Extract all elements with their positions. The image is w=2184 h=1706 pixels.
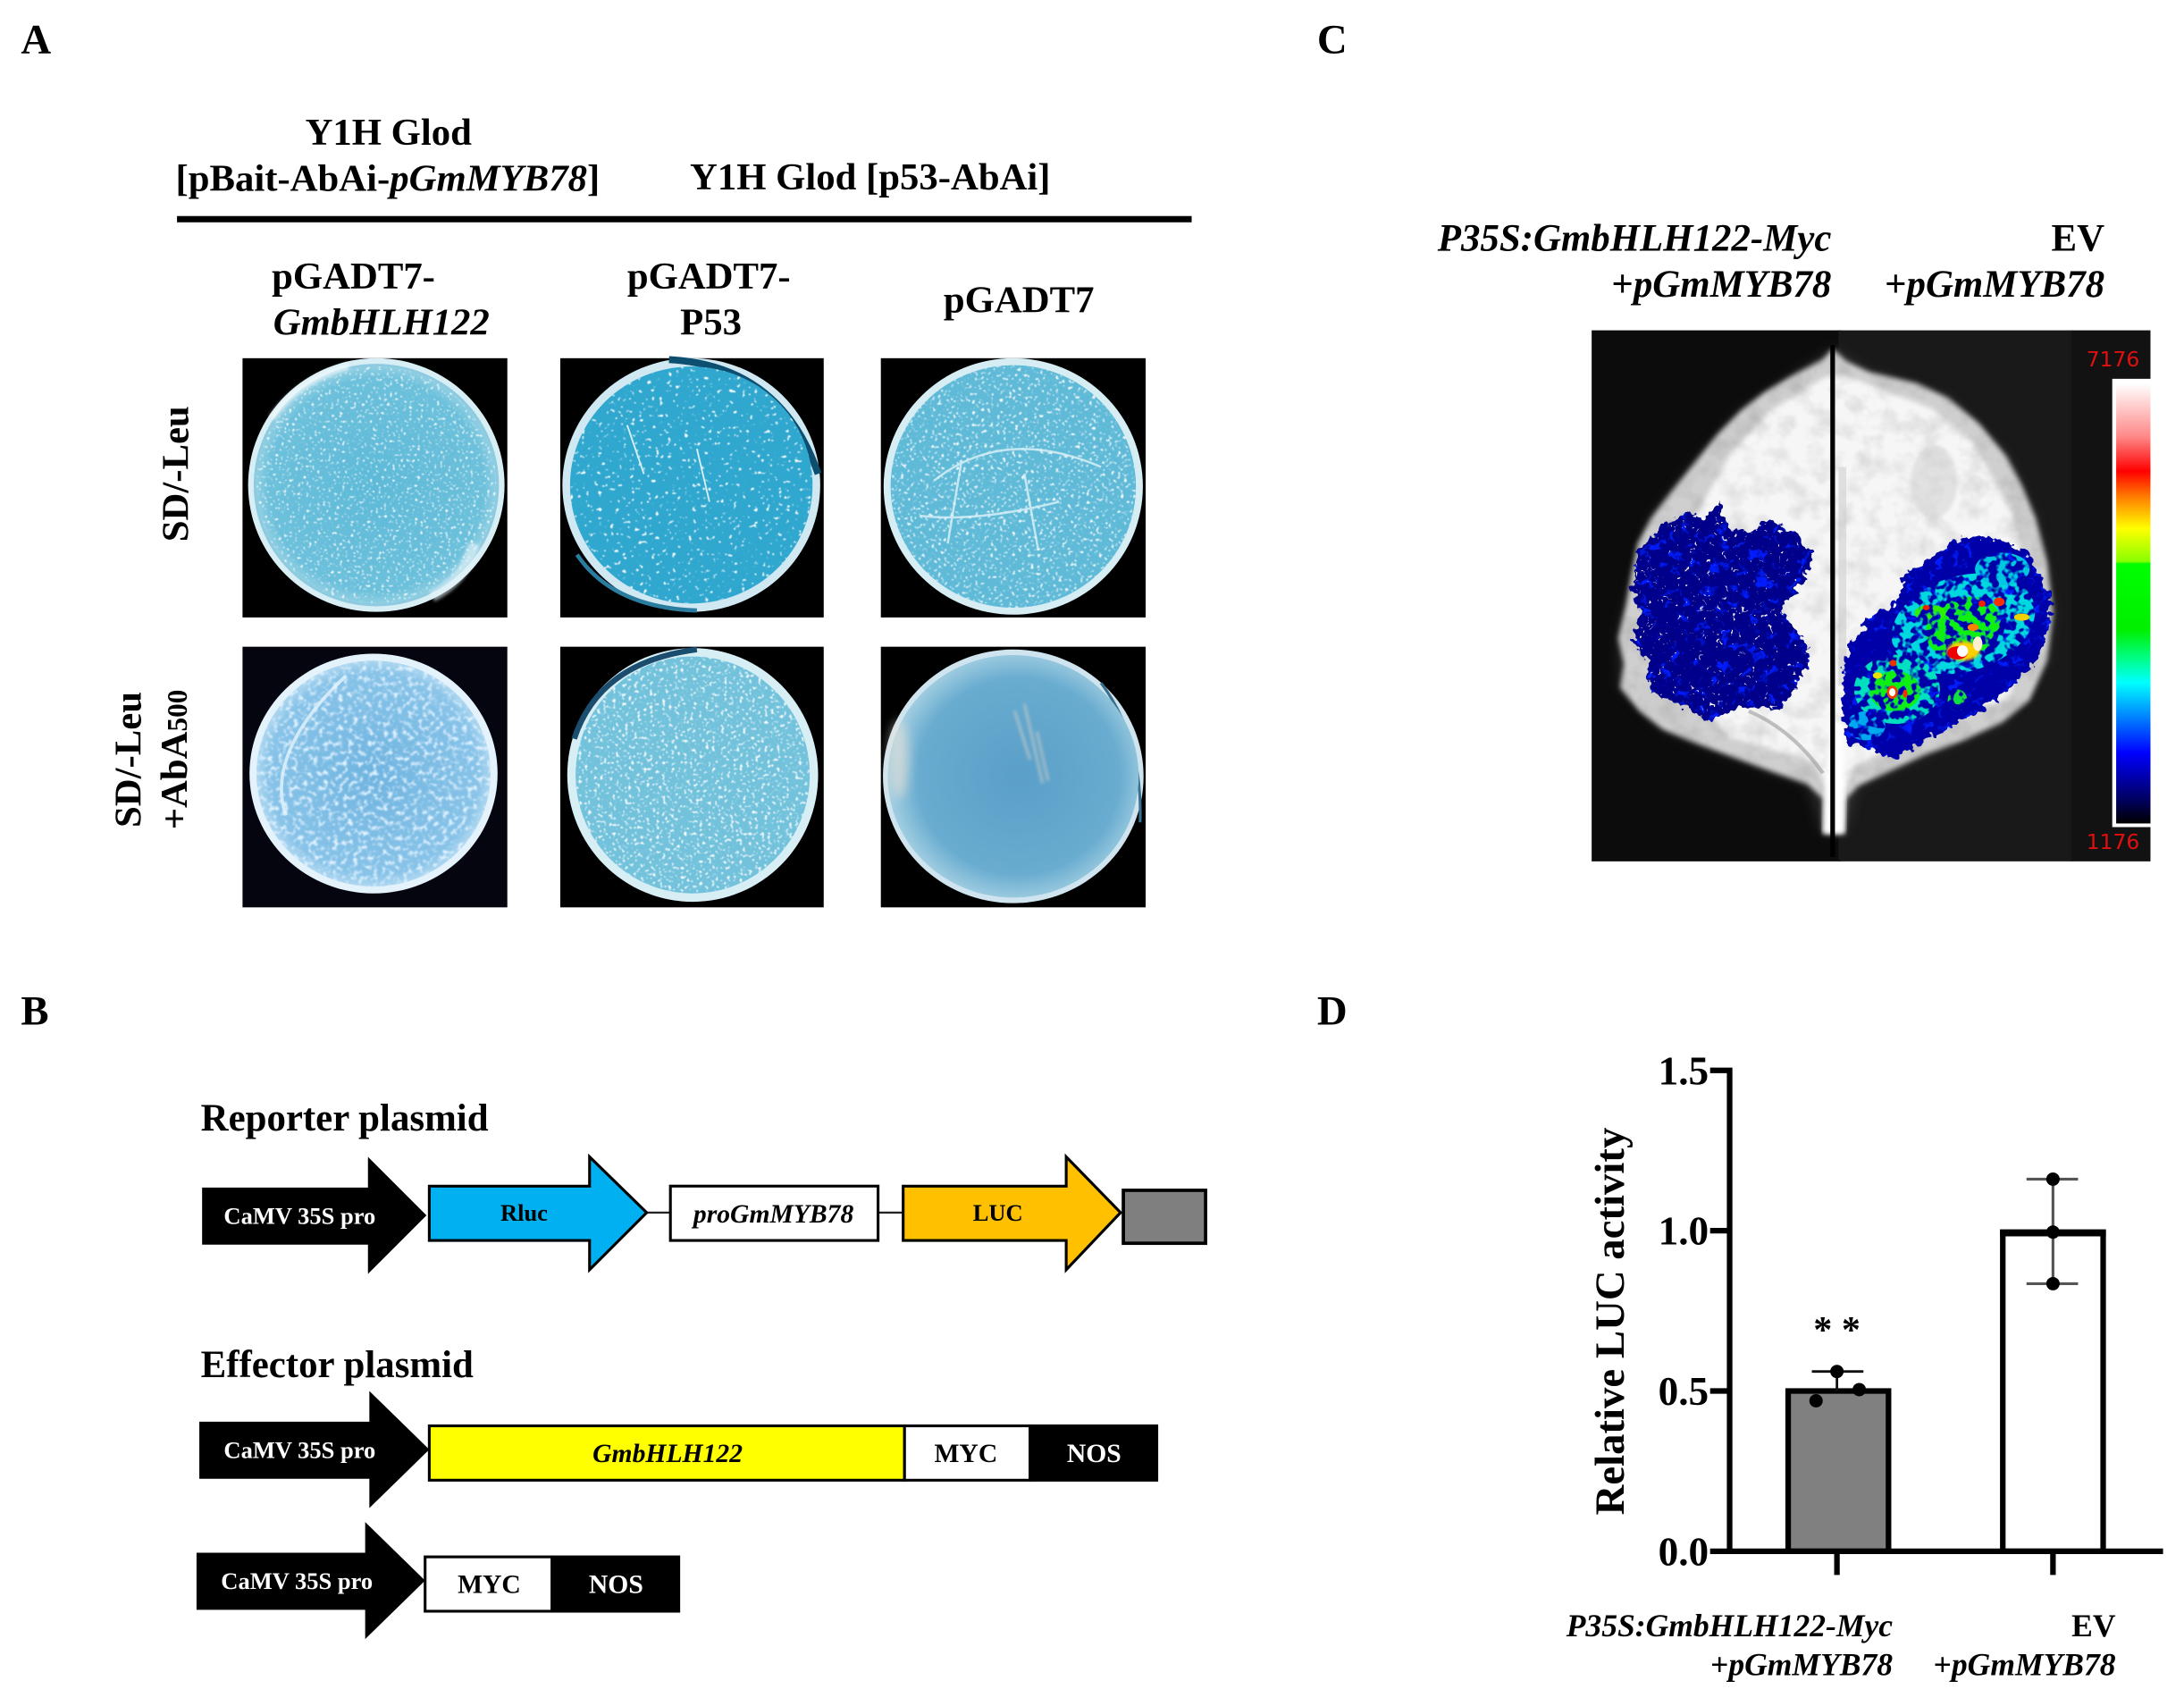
sample label right: EV bbox=[2052, 218, 2104, 260]
plate 6 bbox=[881, 647, 1146, 907]
box: MYC, empty vector bbox=[425, 1557, 552, 1611]
y axis labels: 1.0 bbox=[1659, 1209, 1709, 1254]
sample label left: +pGmMYB78 bbox=[1611, 264, 1831, 306]
y axis labels bbox=[1659, 1048, 1709, 1574]
bar EV top edge bbox=[2000, 1230, 2106, 1236]
panel D: bar chart bbox=[1317, 987, 2163, 1683]
arrow: LUC: LUC bbox=[973, 1199, 1023, 1226]
x label treatment: +pGmMYB78 bbox=[1710, 1647, 1893, 1683]
divider line bbox=[1830, 345, 1835, 857]
plate 1 bbox=[242, 358, 508, 618]
plate 5 bbox=[560, 647, 824, 907]
header rule bbox=[177, 216, 1192, 223]
y axis labels: 0.5 bbox=[1659, 1369, 1709, 1414]
error bar and points: treatment bbox=[1810, 1365, 1866, 1408]
box: MYC bbox=[904, 1426, 1030, 1480]
x label treatment: P35S:GmbHLH122-Myc bbox=[1566, 1608, 1893, 1643]
column label: pGADT7-P53: P53 bbox=[680, 301, 742, 343]
right hotspot, strong signal bbox=[1838, 533, 2057, 762]
sample label left: P35S:GmbHLH122-Myc bbox=[1437, 218, 1831, 260]
scale minimum: 1176 bbox=[2087, 829, 2139, 854]
plate 3 bbox=[881, 358, 1146, 618]
panel A: yeast one-hybrid plates bbox=[21, 16, 1192, 907]
y axis labels: 1.5 bbox=[1659, 1048, 1709, 1093]
heading: reporter plasmid: Reporter plasmid bbox=[201, 1097, 489, 1139]
colour scale bar bbox=[2113, 379, 2150, 828]
box: GmbHLH122: GmbHLH122 bbox=[592, 1440, 743, 1468]
leaf luminescence image bbox=[1592, 331, 2150, 861]
right hotspot intensity core bbox=[1846, 552, 2050, 740]
header: bait strain: Y1H Glod bbox=[306, 112, 472, 154]
y axis labels: 0.0 bbox=[1659, 1529, 1709, 1574]
box: NOS, empty vector bbox=[552, 1556, 680, 1613]
panel letter A: A bbox=[21, 16, 51, 63]
box: NOS bbox=[1030, 1424, 1158, 1482]
arrow: CaMV 35S promoter: CaMV 35S pro bbox=[223, 1202, 375, 1229]
box: MYC, empty vector: MYC bbox=[458, 1571, 521, 1600]
panel letter C: C bbox=[1317, 16, 1348, 63]
arrow: CaMV 35S promoter, effector: CaMV 35S pro bbox=[223, 1436, 375, 1463]
column label: pGADT7-P53: pGADT7- bbox=[627, 256, 791, 298]
left hotspot, weak signal bbox=[1628, 496, 1819, 726]
box: proGmMYB78 bbox=[670, 1186, 878, 1240]
arrow: CaMV 35S promoter bbox=[202, 1157, 426, 1274]
x label EV: +pGmMYB78 bbox=[1934, 1647, 2116, 1683]
sample label right: +pGmMYB78 bbox=[1885, 264, 2104, 306]
leaf blade bbox=[1617, 347, 2057, 835]
arrow: LUC bbox=[903, 1157, 1121, 1270]
header: control strain: Y1H Glod [p53-AbAi] bbox=[690, 156, 1051, 198]
significance stars: * * bbox=[1813, 1309, 1861, 1351]
arrow: CaMV 35S promoter, empty vector bbox=[197, 1522, 425, 1639]
bar: EV bbox=[2003, 1233, 2104, 1551]
arrow: CaMV 35S promoter, empty vector: CaMV 35S pro bbox=[221, 1567, 373, 1594]
panel letter B: B bbox=[21, 987, 49, 1034]
box: NOS: NOS bbox=[1067, 1440, 1121, 1468]
panel B: plasmid constructs bbox=[21, 987, 1205, 1639]
row label: SD/-Leu +AbA500: SD/-Leu bbox=[108, 692, 150, 828]
arrow: CaMV 35S promoter, effector bbox=[199, 1391, 429, 1509]
arrow: Rluc: Rluc bbox=[500, 1199, 548, 1226]
panel letter D: D bbox=[1317, 987, 1348, 1034]
header: bait strain: [pBait-AbAi-pGmMYB78] bbox=[176, 158, 600, 200]
box: MYC: MYC bbox=[934, 1440, 997, 1468]
error bar and points: EV bbox=[2027, 1172, 2078, 1290]
bar: P35S:GmbHLH122-Myc bbox=[1788, 1391, 1888, 1551]
box: terminator bbox=[1123, 1190, 1205, 1243]
panel C: luciferase imaging bbox=[1317, 16, 2150, 861]
scale maximum: 7176 bbox=[2087, 347, 2139, 372]
box: GmbHLH122 bbox=[429, 1426, 904, 1480]
box: proGmMYB78: proGmMYB78 bbox=[691, 1200, 854, 1229]
x label EV: EV bbox=[2071, 1608, 2116, 1643]
axes bbox=[1710, 1071, 2163, 1575]
plate 2 bbox=[560, 358, 824, 618]
column label: pGADT7-GmbHLH122: GmbHLH122 bbox=[273, 301, 490, 343]
column label: pGADT7: pGADT7 bbox=[944, 279, 1094, 321]
box: NOS, empty vector: NOS bbox=[589, 1571, 643, 1600]
plate 4 bbox=[242, 647, 508, 907]
arrow: Rluc bbox=[429, 1157, 647, 1270]
heading: effector plasmid: Effector plasmid bbox=[201, 1344, 474, 1386]
reporter connector lines bbox=[647, 1212, 903, 1214]
column label: pGADT7-GmbHLH122: pGADT7- bbox=[272, 256, 435, 298]
row label: SD/-Leu +AbA500: +AbA500 bbox=[154, 690, 196, 829]
row label: SD/-Leu: SD/-Leu bbox=[155, 406, 197, 542]
y axis title: Relative LUC activity bbox=[1587, 1128, 1634, 1515]
